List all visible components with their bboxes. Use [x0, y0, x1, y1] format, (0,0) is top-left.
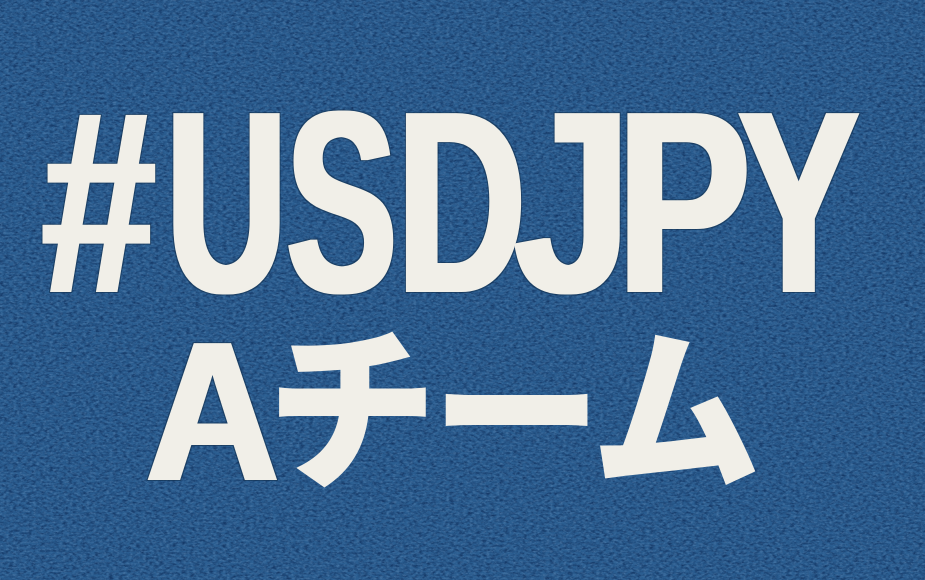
title: #USDJPY: # — [42, 56, 156, 348]
title: #USDJPY — [42, 56, 859, 348]
title: #USDJPY: Y — [738, 57, 859, 348]
subtitle: Aチーム: ム — [592, 318, 760, 512]
title: #USDJPY: J — [514, 58, 631, 348]
title: #USDJPY: U — [166, 58, 287, 348]
subtitle: Aチーム: ー — [431, 322, 602, 510]
subtitle: Aチーム: A — [146, 299, 279, 523]
subtitle: Aチーム: チ — [268, 317, 436, 512]
title: #USDJPY: P — [617, 58, 751, 348]
title: #USDJPY: S — [286, 58, 397, 348]
subtitle: Aチーム — [146, 299, 760, 523]
title: #USDJPY: D — [397, 57, 526, 348]
